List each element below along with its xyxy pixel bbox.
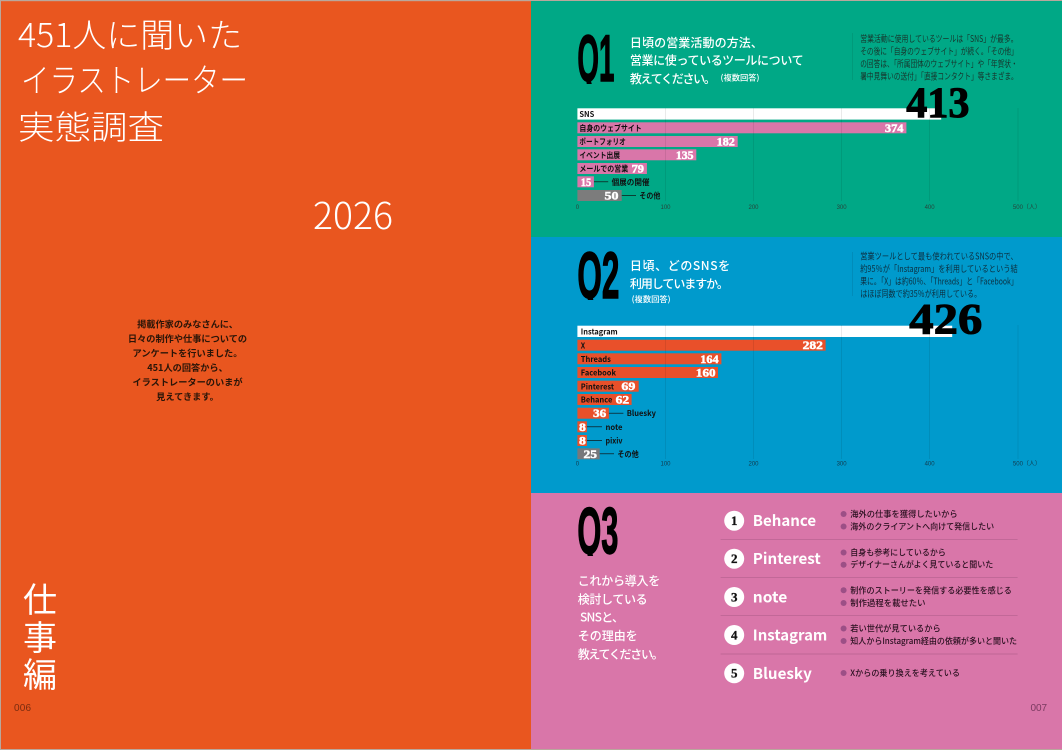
panel: Q2 blue [531, 237, 1062, 493]
bar: pixiv 8: 8 [579, 434, 586, 448]
bar: Behance 62 [577, 392, 632, 406]
Q2 description [860, 250, 1018, 300]
bar: メールでの営業 79 [577, 162, 647, 176]
axis labels [576, 204, 1041, 211]
Q3 question text: これから導入を [578, 572, 660, 589]
bar: 個展の開催 15: 個展の開催 [612, 177, 650, 188]
rank 3: note: 制作過程を載せたい [850, 597, 926, 609]
bar: X 282 [577, 338, 826, 352]
rank 1: Behance: 海外のクライアントへ向けて発信したい [850, 520, 994, 532]
Q3 question text: 検討している [578, 590, 648, 608]
bar: ポートフォリオ 182 [577, 134, 738, 148]
bar: SNS 413 [577, 108, 941, 120]
axis labels [576, 460, 1041, 468]
bar: Threads 164 [577, 352, 721, 366]
bar: メールでの営業 79: メールでの営業 [579, 164, 628, 174]
bar: X 282: 282 [803, 338, 823, 352]
bar: その他 25: その他 [617, 449, 639, 460]
Q2 description: はほぼ同数で約35％が利用している。 [860, 287, 981, 300]
Q2 description: 果に。「X」は約60％、「Threads」と「Facebook」 [860, 274, 1018, 288]
axis labels: 300 [837, 205, 847, 211]
bar: note 8: note [606, 422, 623, 433]
rank 2: Pinterest: デザイナーさんがよく見ていると聞いた [850, 559, 993, 571]
section label: vertical 仕事編: 仕 [23, 573, 57, 622]
rank 5: Bluesky: 5 [731, 666, 738, 681]
Q2 bar chart [576, 296, 1041, 468]
axis labels: 400 [925, 462, 935, 468]
Q2 description: 営業ツールとして最も使われているSNSの中で、 [860, 250, 1018, 262]
bar: Pinterest 69 [577, 379, 639, 393]
title: イラストレーター [21, 54, 248, 102]
rank 4: Instagram [724, 622, 1017, 647]
bar: Bluesky 36 [577, 406, 656, 420]
bar: イベント出展 135: 135 [676, 148, 694, 162]
bar: note 8: 8 [579, 420, 586, 434]
value: 413: 413 [906, 80, 970, 127]
Q2 heading [630, 257, 730, 305]
value: 426: 426 [909, 296, 982, 344]
panel: Q1 green: Q1 [577, 21, 614, 95]
bar: Bluesky 36: 36 [593, 406, 606, 420]
intro text [128, 316, 247, 403]
title: 実態調査 [18, 101, 164, 149]
panel: Q1 green [531, 1, 1062, 237]
bar: 自身のウェブサイト 374: 自身のウェブサイト [579, 123, 642, 134]
rank 3: note: note [753, 586, 788, 608]
Q1 heading: 教えてください。 [630, 70, 716, 87]
Q3 question text: 教えてください。 [578, 646, 664, 662]
rank 1: Behance: 1 [731, 513, 737, 528]
axis labels: 100 [660, 462, 671, 468]
intro text: アンケートを行いました。 [133, 346, 242, 360]
bar: pixiv 8 [577, 434, 623, 448]
section label: vertical 仕事編: 編 [23, 648, 57, 697]
Q1 heading: 日頃の営業活動の方法、 [630, 34, 763, 51]
rank 2: Pinterest: Pinterest [753, 548, 821, 569]
Q2 heading: 日頃、どのSNSを [630, 257, 730, 274]
section label: vertical 仕事編: 事 [23, 611, 57, 660]
rank 5: Bluesky: Xからの乗り換えを考えている [850, 667, 960, 679]
Q1 bar chart [576, 80, 1041, 211]
bar: Pinterest 69: Pinterest [581, 381, 615, 392]
panel: Q3 pink [531, 493, 1062, 750]
bar: イベント出展 135 [577, 148, 696, 162]
rank 2: Pinterest: 自身も参考にしているから [850, 546, 946, 558]
bar: Bluesky 36: Bluesky [627, 408, 656, 419]
section label: vertical 仕事編 [23, 573, 57, 697]
rank 1: Behance: 海外の仕事を獲得したいから [850, 508, 958, 520]
axis labels: 0 [576, 462, 580, 468]
bar: 自身のウェブサイト 374: 374 [885, 121, 904, 135]
rank 2: Pinterest [724, 546, 993, 571]
bar: Behance 62: Behance [581, 395, 613, 406]
Q2 heading: (複数回答) [632, 294, 671, 305]
bar: ポートフォリオ 182: 182 [717, 134, 735, 148]
bar: その他 50: 50 [604, 188, 618, 202]
bar: 自身のウェブサイト 374 [577, 121, 906, 135]
rank 4: Instagram: Instagram [753, 624, 827, 646]
Q2 heading: 利用していますか。 [630, 275, 729, 292]
bar: その他 25: 25 [584, 447, 597, 461]
Q3 question text: その理由を [578, 627, 638, 644]
bar: Behance 62: 62 [616, 392, 629, 406]
rank 3: note [724, 584, 1012, 609]
bar: 個展の開催 15: 15 [581, 175, 591, 189]
bar: Pinterest 69: 69 [621, 379, 635, 393]
bar: 個展の開催 15 [577, 175, 650, 189]
axis labels: 500（人） [1013, 460, 1041, 468]
page number 006: 006 [14, 703, 31, 714]
intro text: 見えてきます。 [156, 389, 219, 403]
Q1 description: 営業活動に使用しているツールは「SNS」が最多。 [860, 32, 1018, 45]
Q3 question text: SNSと、 [580, 608, 624, 626]
bar: ポートフォリオ 182: ポートフォリオ [579, 136, 626, 148]
bar: メールでの営業 79: 79 [632, 162, 644, 176]
intro text: 日々の制作や仕事についての [128, 331, 247, 345]
page number 007: 007 [1030, 703, 1047, 714]
title: 451人に聞いた [18, 9, 242, 57]
axis labels: 0 [576, 205, 580, 211]
bar: その他 50: その他 [639, 190, 660, 202]
axis labels: 300 [837, 462, 847, 468]
bar: Facebook 160: Facebook [581, 368, 616, 379]
axis labels: 500（人） [1013, 204, 1041, 211]
title [18, 9, 248, 149]
Q1 description [860, 32, 1018, 82]
Q3 question text [578, 572, 664, 662]
rank 5: Bluesky [724, 663, 960, 684]
Q1 heading: (複数回答) [720, 72, 760, 84]
Q2 description: 約95％が「Instagram」を利用しているという結 [860, 262, 1018, 275]
axis labels: 200 [748, 462, 759, 468]
bar: その他 50 [577, 188, 660, 202]
intro text: 451人の回答から、 [147, 360, 228, 374]
bar: Facebook 160 [577, 366, 718, 380]
rank 3: note: 3 [731, 589, 738, 604]
panel: Q2 blue: Q2 [577, 238, 619, 312]
bar: X 282: X [581, 340, 585, 351]
bar: Threads 164: 164 [700, 352, 719, 366]
axis labels: 100 [660, 205, 671, 211]
bar: Instagram 426: Instagram [581, 326, 618, 338]
bar: その他 25 [577, 447, 639, 461]
Q1 heading: 営業に使っているツールについて [630, 52, 804, 68]
bar: Threads 164: Threads [581, 354, 611, 365]
axis labels: 400 [925, 205, 935, 211]
rank 1: Behance: Behance [753, 510, 816, 531]
bar: Facebook 160: 160 [696, 366, 716, 380]
bar: note 8 [577, 420, 623, 434]
rank 4: Instagram: 知人からInstagram経由の依頼が多いと聞いた [850, 635, 1017, 647]
year: 2026 [313, 186, 393, 240]
intro text: 掲載作家のみなさんに、 [137, 316, 238, 330]
rank 3: note: 制作のストーリーを発信する必要性を感じる [850, 584, 1012, 596]
bar: pixiv 8: pixiv [606, 436, 623, 446]
bar: イベント出展 135: イベント出展 [579, 150, 620, 161]
intro text: イラストレーターのいまが [132, 374, 243, 388]
rank 1: Behance [724, 508, 994, 532]
rank 5: Bluesky: Bluesky [753, 663, 812, 684]
rank 4: Instagram: 4 [731, 627, 738, 642]
panel: Q3 pink: Q3 [577, 494, 618, 568]
rank 2: Pinterest: 2 [731, 551, 737, 566]
axis labels: 200 [748, 205, 759, 211]
rank 4: Instagram: 若い世代が見ているから [850, 622, 941, 634]
Q1 heading [630, 34, 804, 87]
bar: SNS 413: SNS [579, 109, 594, 120]
bar: Instagram 426 [577, 326, 952, 338]
